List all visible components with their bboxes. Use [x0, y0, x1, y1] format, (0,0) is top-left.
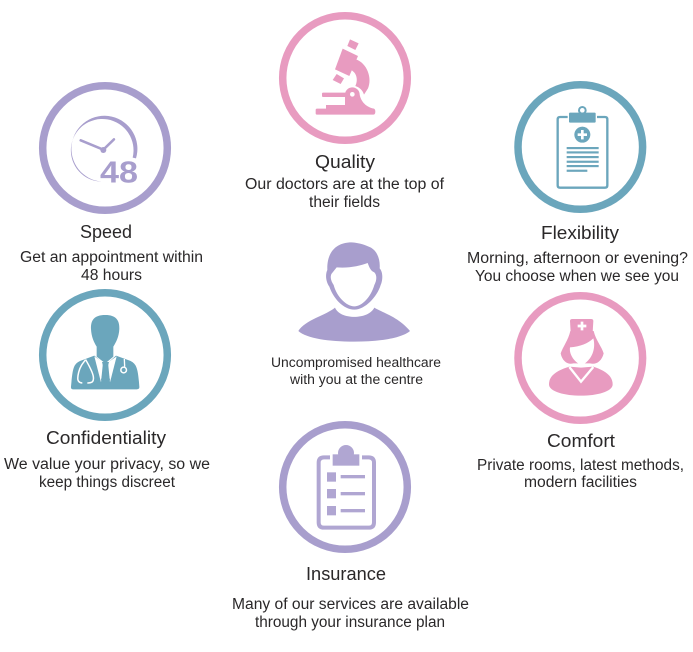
panel: quality: [245, 16, 445, 211]
heading: confidentiality: Confidentiality: [46, 427, 167, 448]
icon: checklist clipboard in purple ring: [283, 425, 407, 549]
text: centre caption: [271, 355, 441, 387]
text: speed description: 48 hours: [81, 267, 142, 284]
heading: speed: Speed: [80, 221, 132, 242]
text: quality description: their fields: [309, 194, 380, 211]
text: centre caption: with you at the centre: [289, 372, 423, 387]
panel: speed: [20, 86, 203, 284]
icon: clock with 48 in purple ring: 48: [100, 154, 138, 190]
text: flexibility description: [467, 250, 688, 285]
text: confidentiality description: [4, 456, 210, 491]
text: quality description: Our doctors are at the top of: [245, 176, 445, 193]
text: comfort description: modern facilities: [524, 474, 637, 491]
text: insurance description: Many of our services are available: [232, 596, 469, 613]
panel: comfort: [477, 296, 684, 491]
icon: microscope in pink ring: [283, 16, 407, 140]
icon: medical clipboard in teal ring: [518, 85, 643, 209]
text: flexibility description: You choose when we see you: [475, 268, 679, 285]
text: speed description: Get an appointment within: [20, 249, 203, 266]
icon: person silhouette: [298, 242, 410, 342]
text: comfort description: [477, 457, 684, 491]
text: quality description: [245, 176, 445, 211]
panel: flexibility: [467, 85, 688, 285]
text: confidentiality description: We value your privacy, so we: [4, 456, 210, 473]
text: comfort description: Private rooms, latest methods,: [477, 457, 684, 474]
text: confidentiality description: keep things discreet: [39, 474, 176, 491]
panel: centre: [271, 242, 441, 387]
heading: comfort: Comfort: [547, 430, 615, 451]
heading: flexibility: Flexibility: [541, 222, 620, 243]
text: insurance description: [232, 596, 469, 631]
text: insurance description: through your insurance plan: [255, 614, 445, 631]
panel: insurance: [232, 425, 469, 631]
heading: quality: Quality: [315, 151, 376, 172]
text: centre caption: Uncompromised healthcare: [271, 355, 441, 370]
icon: nurse in pink ring: [518, 296, 643, 420]
icon: doctor in teal ring: [43, 293, 167, 417]
text: speed description: [20, 249, 203, 284]
panel: confidentiality: [4, 293, 210, 491]
icon: clock with 48 in purple ring: [43, 86, 167, 210]
heading: insurance: Insurance: [306, 563, 386, 584]
text: flexibility description: Morning, afternoon or evening?: [467, 250, 688, 267]
